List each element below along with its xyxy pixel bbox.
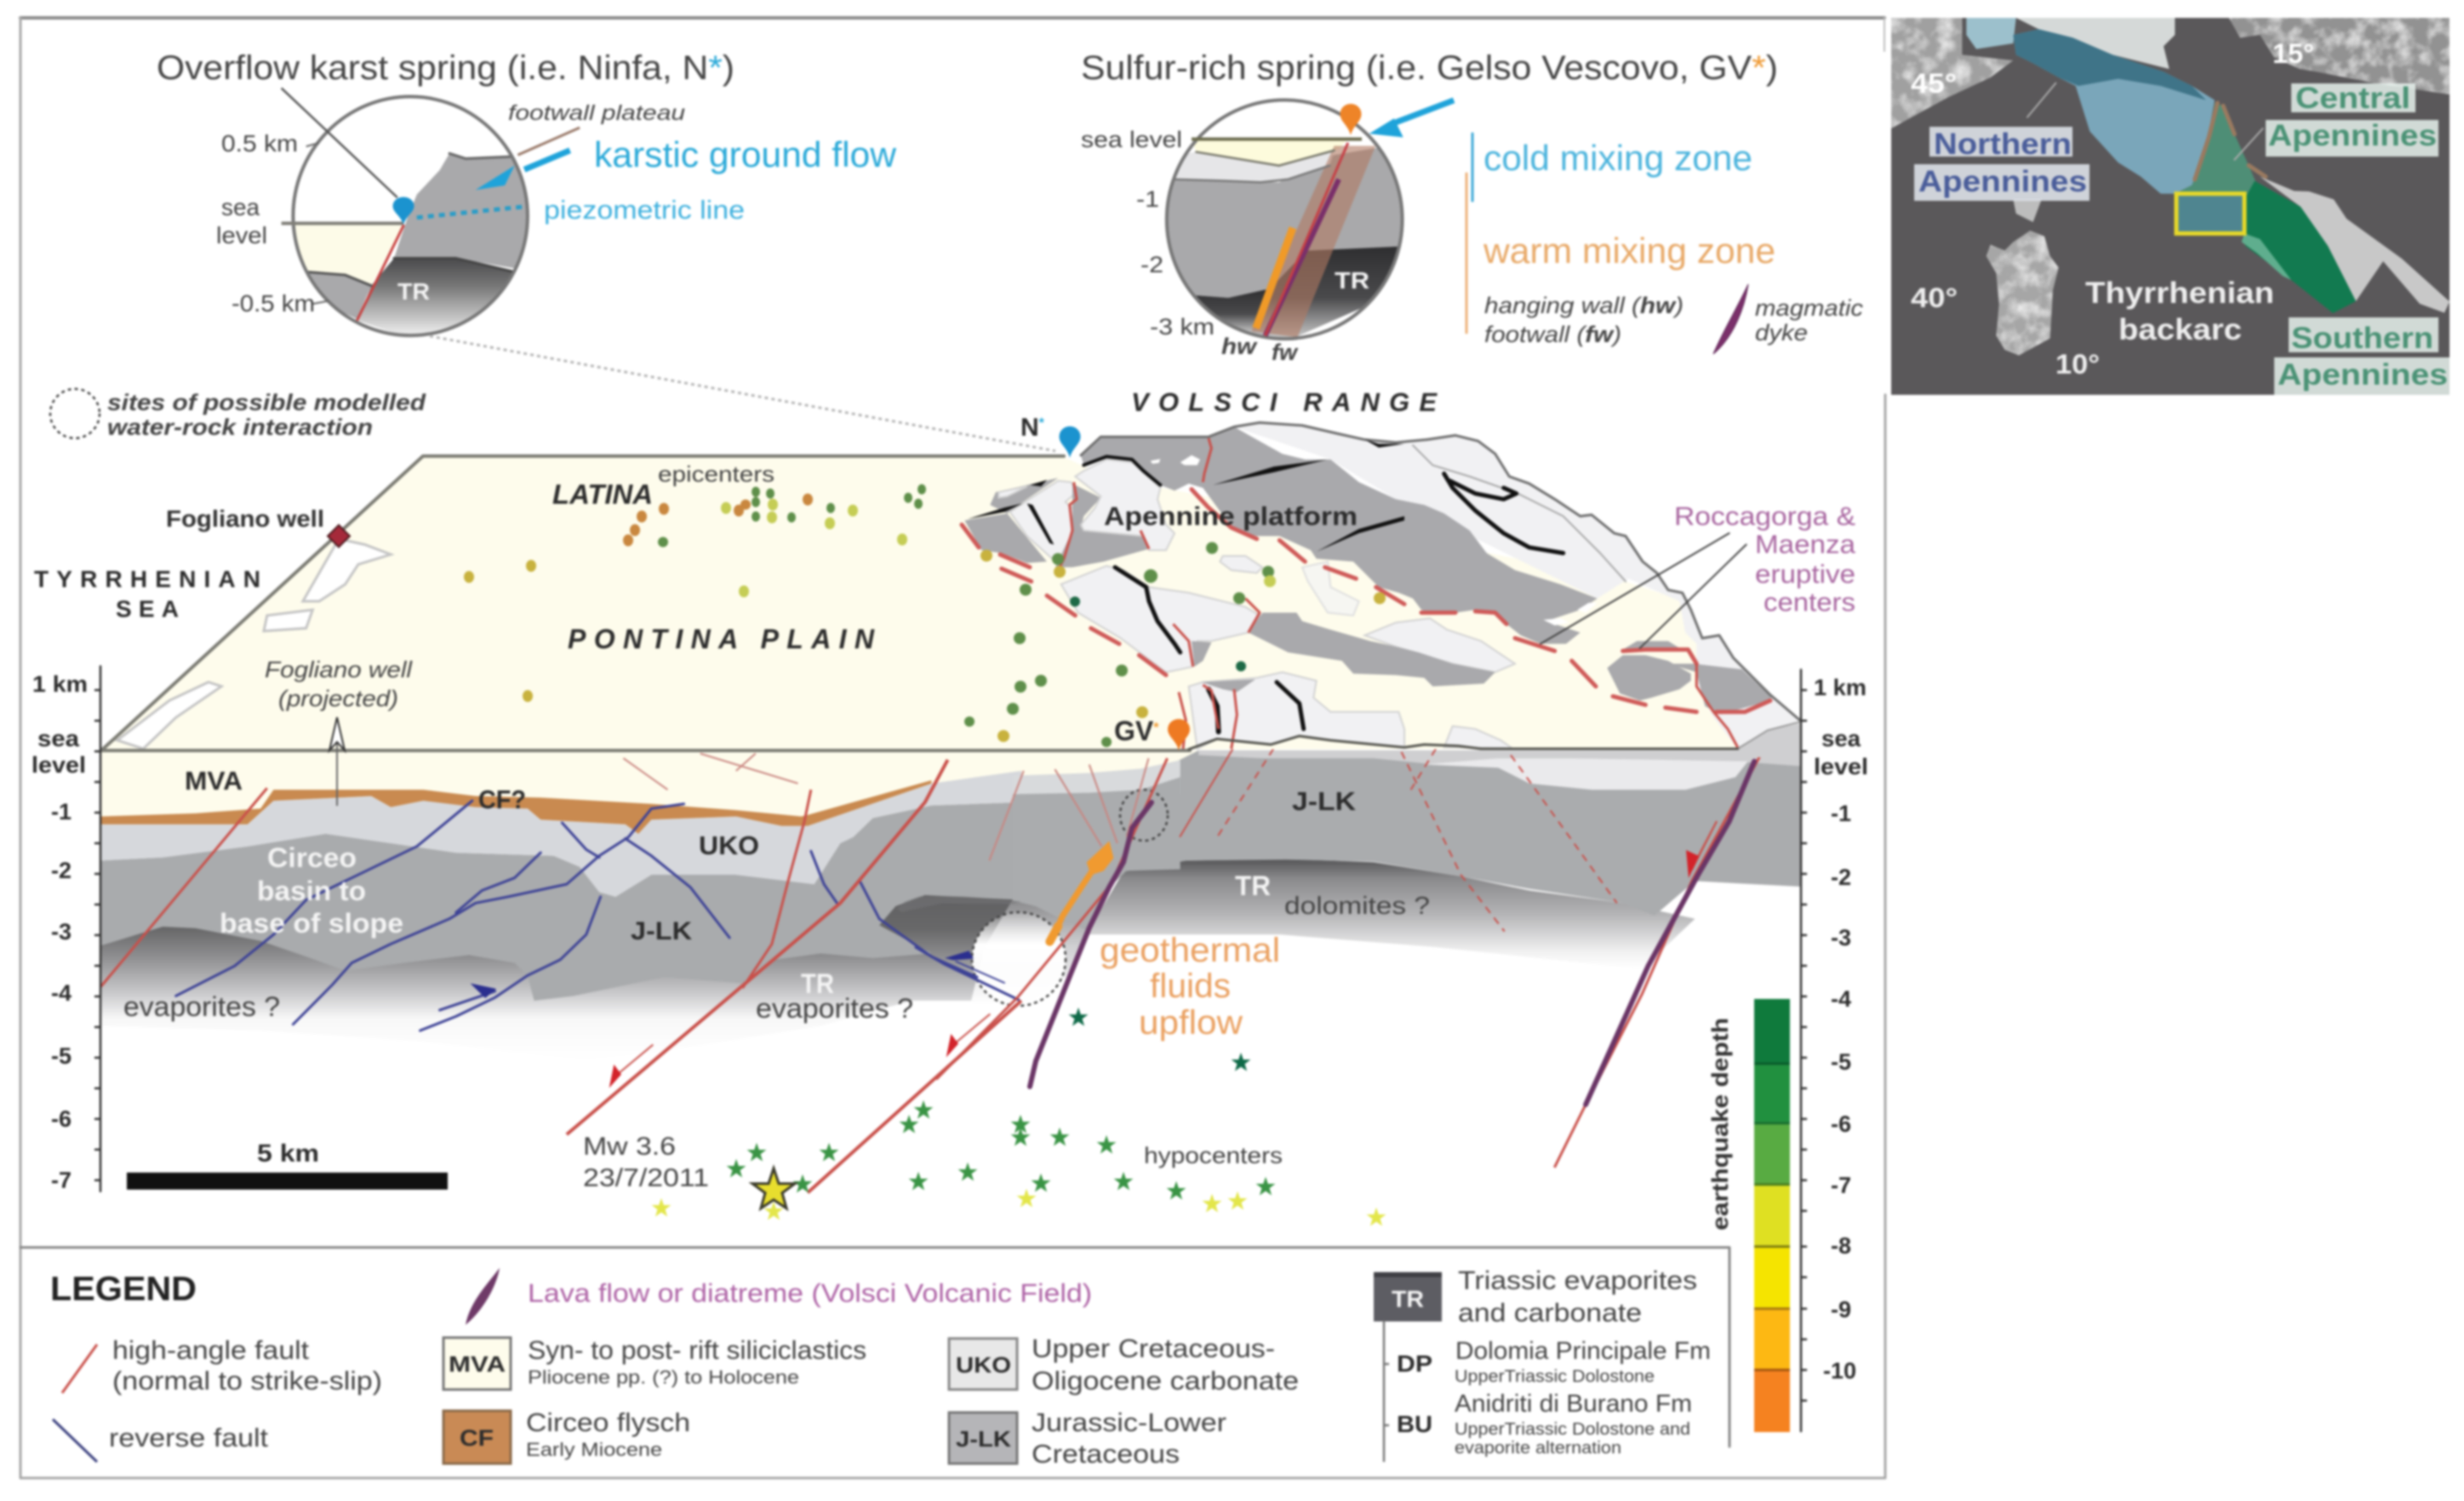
circle labels: -0.5 km bbox=[232, 290, 315, 317]
legend item: CF: CF bbox=[460, 1425, 494, 1451]
legend item: high-angle fault: (normal to strike-slip) bbox=[112, 1366, 382, 1395]
heading: sulfur-rich spring: Sulfur-rich spring (i.e. Gelso Vescovo, GV *) bbox=[1081, 49, 1778, 87]
dyke: east bbox=[1586, 762, 1754, 1104]
label: Roccagorga and Maenza eruptive centers: Roccagorga & bbox=[1674, 501, 1855, 531]
middle J-LK band bbox=[1249, 613, 1495, 687]
circle labels bbox=[216, 101, 897, 317]
map labels: Northern bbox=[1934, 128, 2072, 161]
heading: legend: LEGEND bbox=[50, 1270, 197, 1308]
map labels: VOLSCI RANGE bbox=[1131, 387, 1438, 417]
map labels bbox=[34, 387, 1438, 746]
left depth axis bbox=[31, 666, 100, 1193]
map labels: Apennines bbox=[2268, 119, 2437, 152]
circle labels: footwall plateau bbox=[508, 101, 685, 125]
right depth axis: -5 bbox=[1831, 1049, 1851, 1075]
cross-section labels: basin to bbox=[257, 876, 366, 906]
left depth axis: 1 km bbox=[32, 671, 88, 697]
northeast carbonate strip bbox=[1234, 423, 1800, 749]
circle labels: -1 bbox=[1136, 186, 1159, 212]
right depth axis: -8 bbox=[1831, 1233, 1851, 1258]
panel: legend bbox=[20, 1247, 1729, 1469]
legend item: TR group: evaporite alternation bbox=[1455, 1439, 1621, 1458]
circle labels: karstic ground flow bbox=[594, 134, 897, 174]
land: Sardinia bbox=[1987, 231, 2059, 356]
cross-section labels: CF? bbox=[478, 785, 526, 814]
legend item: MVA: Syn- to post- rift siliciclastics bbox=[528, 1335, 866, 1365]
layer: Triassic dolomites east bbox=[1086, 859, 1695, 969]
map labels: Fogliano well bbox=[166, 505, 324, 532]
left depth axis: -1 bbox=[51, 799, 71, 825]
cross-section labels: UKO bbox=[699, 830, 759, 860]
label: Roccagorga and Maenza eruptive centers: Maenza bbox=[1755, 529, 1856, 559]
layer: Circeo flysch bbox=[101, 780, 931, 834]
legend item: high-angle fault: high-angle fault bbox=[112, 1335, 309, 1365]
legend item: UKO: UKO bbox=[956, 1352, 1011, 1378]
right depth axis: sea bbox=[1821, 726, 1861, 751]
label: Roccagorga and Maenza eruptive centers bbox=[1674, 501, 1856, 617]
legend item: TR group: Anidriti di Burano Fm bbox=[1455, 1390, 1692, 1418]
circle labels: sea level bbox=[1081, 127, 1182, 152]
legend item: CF: Circeo flysch bbox=[526, 1407, 690, 1437]
mixing zone key: cold mixing zone bbox=[1484, 138, 1752, 178]
dotted connector to Ninfa spring bbox=[430, 336, 1055, 451]
cross-section labels: J-LK bbox=[1292, 786, 1357, 816]
map labels: 15° bbox=[2272, 38, 2314, 69]
reverse faults bbox=[176, 801, 977, 1030]
legend item: TR group: UpperTriassic Dolostone bbox=[1455, 1367, 1655, 1386]
cross-section labels: MVA bbox=[185, 766, 243, 796]
circle labels: 0.5 km bbox=[221, 130, 298, 157]
map: land and Apennine belts bbox=[1891, 18, 2450, 356]
chart: earthquake depth colour scale bbox=[1707, 999, 1790, 1432]
circle labels: -2 bbox=[1141, 252, 1163, 277]
mixing zone key bbox=[1466, 134, 1775, 347]
thrust traces bbox=[1083, 457, 1160, 485]
belt: central Apennines bbox=[2175, 103, 2257, 199]
map labels: Apennine platform bbox=[1104, 501, 1358, 531]
circle labels: hw bbox=[1221, 334, 1258, 359]
legend item: J-LK bbox=[949, 1407, 1226, 1469]
map labels: GV bbox=[1114, 716, 1153, 746]
circular section diagram bbox=[1159, 100, 1454, 340]
panel: inset sulfur spring bbox=[1081, 49, 1864, 365]
arrow: geothermal upflow bbox=[1049, 841, 1113, 942]
legend item: J-LK: Jurassic-Lower bbox=[1032, 1407, 1226, 1437]
legend item: reverse fault bbox=[53, 1419, 268, 1462]
Pontina plain bbox=[101, 457, 1738, 750]
eruptive centre leaders bbox=[1541, 534, 1729, 644]
land: eastern peninsula bbox=[2260, 177, 2450, 313]
thrust arrow at site circle bbox=[916, 947, 1019, 1000]
legend item: TR group: and carbonate bbox=[1458, 1298, 1642, 1327]
arrow: slip near central fault bbox=[946, 1014, 990, 1058]
legend item: TR group: Dolomia Principale Fm bbox=[1455, 1338, 1711, 1365]
panel: cross-section bbox=[100, 749, 1801, 1193]
cross-section labels: TR bbox=[1235, 870, 1271, 901]
legend item: MVA: MVA bbox=[449, 1351, 506, 1377]
central white block bbox=[1061, 566, 1260, 672]
right depth axis: level bbox=[1814, 754, 1868, 779]
label: Mw 3.6 event: 23/7/2011 bbox=[583, 1164, 709, 1192]
plain outline bbox=[101, 456, 1738, 750]
panel: Apennines location map bbox=[1891, 18, 2450, 395]
eastern faults and dykes bbox=[936, 749, 1760, 1167]
label: geothermal fluids upflow bbox=[1100, 932, 1280, 1042]
legend item: TR group: Triassic evaporites bbox=[1458, 1265, 1697, 1295]
legend item: TR group: TR bbox=[1392, 1286, 1424, 1312]
mountain outline bbox=[1081, 423, 1800, 721]
circle labels: fw bbox=[1272, 340, 1299, 365]
map labels: Apennines bbox=[2278, 358, 2448, 391]
layer: Jurassic-Lower Cretaceous west bbox=[101, 802, 1021, 1001]
central J-LK band bbox=[1081, 427, 1598, 644]
map labels: LATINA bbox=[552, 479, 653, 510]
icon: orange spring pin bbox=[1340, 104, 1362, 135]
layer: MVA siliciclastics bbox=[100, 750, 1198, 827]
arrow: karstic flow bbox=[476, 151, 570, 190]
icon: main shock star bbox=[752, 1168, 795, 1208]
map labels bbox=[1911, 38, 2450, 395]
western blocks bbox=[964, 513, 1047, 563]
map labels: 10° bbox=[2055, 349, 2100, 380]
callout: modelled water-rock interaction sites: sites of possible modelled bbox=[107, 390, 426, 415]
icon: blue spring pin bbox=[393, 197, 414, 225]
left depth axis: -3 bbox=[51, 919, 71, 945]
left depth axis: -4 bbox=[51, 980, 71, 1006]
label: geothermal fluids upflow: geothermal bbox=[1100, 932, 1280, 969]
cross-section labels: Circeo bbox=[267, 842, 357, 873]
label: Mw 3.6 event bbox=[583, 1133, 709, 1192]
cross-section labels: dolomites ? bbox=[1284, 893, 1430, 920]
valley outcrops bbox=[1220, 556, 1262, 573]
high-angle faults bbox=[101, 754, 1021, 1193]
layer: Upper Cretaceous-Oligocene west bbox=[101, 771, 1021, 897]
callout: modelled water-rock interaction sites bbox=[50, 389, 426, 440]
legend item: high-angle fault bbox=[62, 1335, 382, 1395]
left depth axis: sea bbox=[37, 726, 80, 751]
map labels: 40° bbox=[1911, 283, 1958, 313]
label: Roccagorga and Maenza eruptive centers: centers bbox=[1764, 587, 1855, 617]
map labels: * bbox=[1039, 416, 1045, 431]
map labels: Southern bbox=[2291, 322, 2433, 355]
southern blocks bbox=[1189, 672, 1404, 749]
map labels: Fogliano well bbox=[265, 657, 413, 682]
right depth axis: 1 km bbox=[1814, 675, 1867, 700]
circle labels: TR bbox=[397, 278, 430, 305]
map labels: 45° bbox=[1911, 68, 1957, 99]
heading: overflow karst spring: Overflow karst spring (i.e. Ninfa, N *) bbox=[157, 49, 735, 87]
map labels: epicenters bbox=[658, 461, 775, 487]
map labels: TYRRHENIAN bbox=[34, 566, 260, 592]
legend item: J-LK: Cretaceous bbox=[1032, 1439, 1180, 1469]
map labels: backarc bbox=[2118, 313, 2242, 346]
right depth axis: -9 bbox=[1831, 1297, 1851, 1322]
circle labels: level bbox=[216, 222, 267, 248]
label: geothermal fluids upflow: upflow bbox=[1139, 1004, 1243, 1042]
map labels: Thyrrhenian bbox=[2085, 277, 2274, 310]
label: geothermal fluids upflow: fluids bbox=[1150, 967, 1231, 1005]
right depth axis: -6 bbox=[1831, 1111, 1851, 1137]
panel: map surface bbox=[34, 387, 1856, 806]
epicenter dots bbox=[464, 484, 1386, 747]
icon: Ninfa spring pin bbox=[1059, 426, 1081, 458]
map labels: (projected) bbox=[278, 686, 398, 711]
border faults bbox=[962, 525, 979, 547]
circle labels: sea bbox=[221, 194, 260, 220]
study area box bbox=[2176, 194, 2244, 233]
mixing zone key: footwall ( fw) bbox=[1484, 322, 1621, 347]
map labels: N bbox=[1020, 414, 1039, 442]
marker: Fogliano well bbox=[328, 525, 350, 547]
mixing zone key: warm mixing zone bbox=[1483, 231, 1775, 271]
layer: Jurassic-Lower Cretaceous east bbox=[1061, 750, 1801, 916]
arrow: slip near eastern fault bbox=[1686, 821, 1717, 878]
map labels: Central bbox=[2295, 82, 2410, 115]
arrow: slip near western fault bbox=[609, 1045, 653, 1088]
legend item: TR group bbox=[1374, 1265, 1711, 1461]
right depth axis: -3 bbox=[1831, 925, 1851, 950]
cross-section labels: J-LK bbox=[631, 917, 692, 945]
left depth axis: -6 bbox=[51, 1106, 71, 1132]
layer: Triassic west bbox=[101, 887, 1021, 1060]
mixing zone key: hanging wall ( hw) bbox=[1484, 293, 1684, 318]
cross-section labels: base of slope bbox=[220, 908, 403, 939]
legend item: TR group: UpperTriassic Dolostone and bbox=[1455, 1420, 1690, 1439]
layers: central fault zone bbox=[896, 760, 1181, 1004]
scale bar: 5 km: 5 km bbox=[257, 1140, 319, 1167]
circle labels: piezometric line bbox=[544, 195, 745, 225]
legend item: TR group: DP bbox=[1397, 1350, 1432, 1377]
cross-section labels bbox=[123, 766, 1430, 1024]
legend item: UKO: Oligocene carbonate bbox=[1032, 1366, 1299, 1395]
legend item: CF bbox=[443, 1407, 690, 1464]
belt: northern Apennines bbox=[1966, 18, 2016, 49]
coastline outlines bbox=[117, 539, 391, 749]
map labels: Apennines bbox=[1918, 165, 2087, 198]
legend item: UKO: Upper Cretaceous- bbox=[1032, 1333, 1275, 1363]
legend item: MVA bbox=[443, 1335, 866, 1390]
circle labels: -3 km bbox=[1150, 314, 1215, 340]
cross-section labels: TR bbox=[801, 968, 834, 999]
legend item: lava flow bbox=[466, 1268, 1092, 1325]
panel frame bbox=[20, 18, 1885, 1478]
label: Roccagorga and Maenza eruptive centers: eruptive bbox=[1755, 559, 1855, 589]
callout: modelled water-rock interaction sites: water-rock interaction bbox=[107, 414, 373, 440]
chart: earthquake depth colour scale: earthquake depth bbox=[1707, 1018, 1733, 1230]
left depth axis: -5 bbox=[51, 1043, 71, 1069]
map labels: PONTINA PLAIN bbox=[568, 624, 875, 654]
arrow: projected Fogliano well bbox=[329, 717, 345, 806]
right depth axis: -4 bbox=[1831, 986, 1851, 1012]
legend item: TR group: BU bbox=[1397, 1411, 1432, 1437]
label: hypocenters: hypocenters bbox=[1144, 1143, 1283, 1168]
right depth axis: -10 bbox=[1823, 1358, 1856, 1384]
land: Corsica bbox=[2013, 199, 2042, 222]
legend item: UKO bbox=[949, 1333, 1299, 1395]
left depth axis: level bbox=[31, 752, 86, 778]
scale bar: 5 km bbox=[127, 1140, 448, 1190]
right depth axis: -2 bbox=[1831, 865, 1851, 890]
dyke: west bbox=[1030, 802, 1152, 1087]
legend item: J-LK: J-LK bbox=[956, 1426, 1011, 1452]
icon: magmatic dyke bbox=[1713, 284, 1864, 354]
panel: inset karst spring bbox=[157, 49, 897, 337]
right depth axis bbox=[1801, 670, 1868, 1431]
southeast J-LK blocks bbox=[1607, 655, 1691, 700]
right depth axis: -1 bbox=[1831, 801, 1851, 826]
layer: Upper Cretaceous east bbox=[1198, 750, 1801, 790]
legend item: reverse fault: reverse fault bbox=[109, 1423, 268, 1452]
left depth axis: -7 bbox=[51, 1167, 71, 1193]
map labels: * bbox=[1153, 721, 1159, 735]
icon: magmatic dyke: magmatic bbox=[1755, 295, 1864, 321]
map labels: SEA bbox=[116, 596, 179, 622]
cross-section labels: evaporites ? bbox=[123, 991, 280, 1022]
hypocenter stars bbox=[652, 1007, 1386, 1226]
Volsci Range mountain block bbox=[962, 423, 1800, 757]
left depth axis: -2 bbox=[51, 858, 71, 883]
circular section diagram bbox=[282, 88, 580, 337]
legend item: MVA: Pliocene pp. (?) to Holocene bbox=[528, 1367, 799, 1388]
cross-section labels: evaporites ? bbox=[756, 993, 913, 1024]
circle labels: TR bbox=[1335, 267, 1369, 294]
land: Po plain bbox=[2016, 18, 2175, 69]
land: Balkans bbox=[2229, 18, 2450, 94]
legend item: lava flow: Lava flow or diatreme (Volsci Volcanic Field) bbox=[528, 1278, 1092, 1308]
site circles bbox=[972, 790, 1168, 1006]
icon: Gelso Vescovo spring pin bbox=[1168, 719, 1190, 750]
belt: southern Apennines bbox=[2244, 181, 2356, 313]
legend item: CF: Early Miocene bbox=[526, 1439, 662, 1460]
icon: magmatic dyke: dyke bbox=[1755, 320, 1808, 345]
label: Mw 3.6 event: Mw 3.6 bbox=[583, 1133, 676, 1161]
land: western Alps bbox=[1891, 18, 2013, 128]
circle labels bbox=[1081, 127, 1369, 365]
arrow: cold flow bbox=[1369, 100, 1454, 137]
right depth axis: -7 bbox=[1831, 1173, 1851, 1198]
